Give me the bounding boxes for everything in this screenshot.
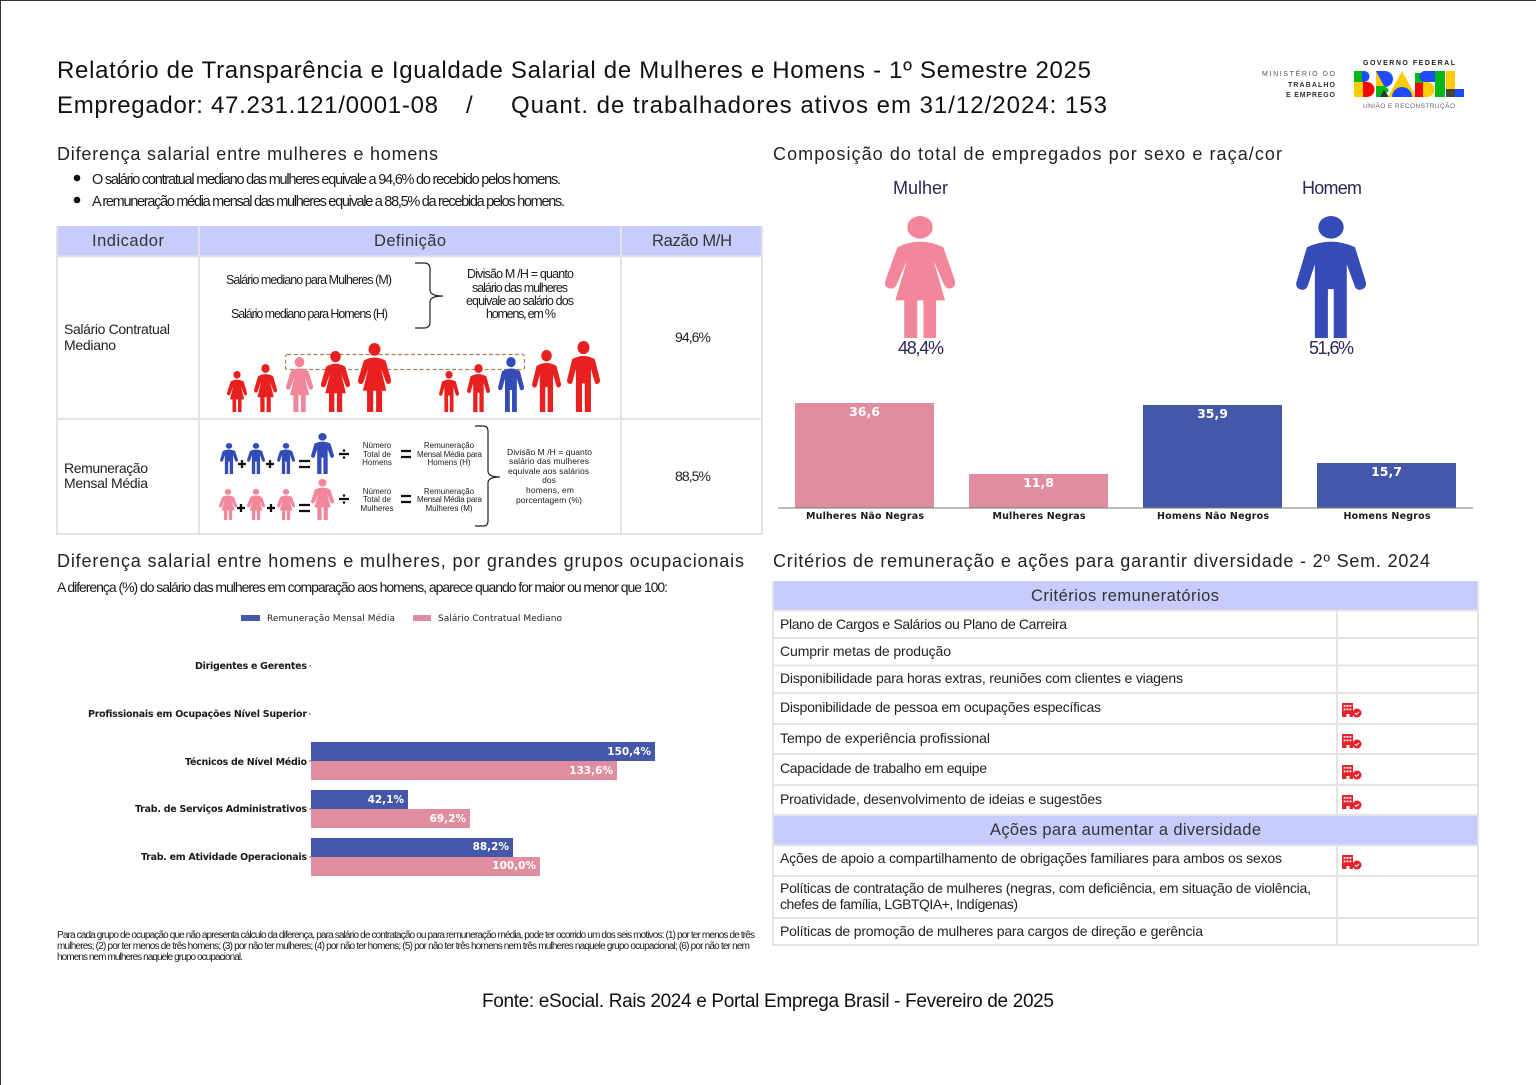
formula text: men and women: Remuneração [424,487,475,496]
bullet list: A remuneração média mensal das mulheres equivale a 88,5% da recebida pelos homens. [92,194,565,210]
formula text: men and women: Número [363,487,392,496]
table: remuneration criteria: Capacidade de trabalho em equipe [780,760,987,776]
table: remuneration criteria: Proatividade, desenvolvimento de ideias e sugestões [780,791,1102,807]
bar chart: occupations: Profissionais em Ocupações Nível Superior [88,709,307,720]
definition: median salary: Divisão M /H = quanto [467,267,574,281]
table: remuneration criteria: Critérios remuneratórios [1031,587,1219,605]
value: 48,4%: 48,4% [898,338,944,358]
table: remuneration criteria: Disponibilidade para horas extras, reuniões com clientes e viagens [780,670,1183,686]
table: diversity actions: Ações para aumentar a diversidade [990,821,1261,839]
footnote [57,930,755,963]
source note: Fonte: eSocial. Rais 2024 e Portal Emprega Brasil - Fevereiro de 2025 [482,991,1054,1012]
title [57,57,1107,119]
formula text: men and women: Mulheres (M) [425,504,473,513]
title: Quant. de trabalhadores ativos em 31/12/2024: 153 [511,92,1107,119]
bar chart: occupations: 88,2% [473,841,509,853]
panel: composition [773,144,1473,522]
bar chart: sex and race: Mulheres Não Negras [806,511,924,522]
definition: median salary: homens, em % [486,307,556,321]
definition: median salary: Salário mediano para Mulheres (M) [226,273,392,287]
formula text: men and women: equivale aos salários [508,466,589,476]
table: diversity actions: Políticas de promoção de mulheres para cargos de direção e gerência [780,923,1203,939]
formula text: men and women: Homens (H) [427,458,471,467]
table header [92,232,732,250]
formula text: men and women: dos [542,475,556,485]
bar chart: occupations [88,661,655,876]
definition: median salary [226,263,574,328]
title: / [466,92,473,119]
bullet list [74,172,565,210]
subtitle: A diferença (%) do salário das mulheres em comparação aos homens, aparece quando for maior ou menor que 100: [57,579,668,595]
bar chart: sex and race: 15,7 [1371,464,1402,479]
table: remuneration criteria: Disponibilidade de pessoa em ocupações específicas [780,699,1101,715]
bar chart: sex and race: Homens Não Negros [1157,511,1269,522]
icons: median pictogram row [227,341,600,412]
icon: action present [1342,855,1362,870]
row label: remuneração mensal média: Mensal Média [64,475,148,491]
bar chart: occupations: Dirigentes e Gerentes [195,661,307,672]
bar chart: sex and race: Homens Negros [1344,511,1431,522]
formula text: men and women: Mensal Média para [417,450,483,459]
formula text: men and women: Remuneração [424,441,475,450]
table: remuneration criteria: Plano de Cargos e Salários ou Plano de Carreira [780,616,1067,632]
formula text: men and women [361,426,592,526]
ministry logo: TRABALHO [1288,82,1336,89]
formula text: men and women: Total de [363,495,392,504]
table: diversity actions [780,821,1311,939]
bar chart: occupations: Trab. em Atividade Operacionais [141,852,307,863]
bar chart: sex and race [778,403,1473,522]
title: Empregador: 47.231.121/0001-08 [57,92,438,119]
footnote: homens nem mulheres naquele grupo ocupacional. [57,952,243,963]
formula text: men and women: Número [363,441,392,450]
bar chart: occupations: Trab. de Serviços Administrativos [135,804,307,815]
ministry logo: MINISTÉRIO DO [1262,69,1336,78]
title: Relatório de Transparência e Igualdade Salarial de Mulheres e Homens - 1º Semestre 2025 [57,57,1091,84]
footnote: Para cada grupo de ocupação que não apresenta cálculo da diferença, para salário de contratação ou para remuneração média, pode ter ocorrido um dos seis motivos: (1) por ter menos de três [57,930,755,941]
bar chart: sex and race: 35,9 [1197,406,1228,421]
bullet list: O salário contratual mediano das mulheres equivale a 94,6% do recebido pelos homens. [92,172,561,188]
value: 51,6%: 51,6% [1309,338,1354,358]
bar chart: sex and race: 36,6 [849,404,880,419]
ministry logo: E EMPREGO [1286,92,1336,99]
formula text: men and women: Mulheres [361,504,393,513]
footnote: mulheres; (2) por ter menos de três homens; (3) por não ter mulheres; (4) por não ter homens; (5) por não ter três homens nem três mulheres naquele grupo ocupacional; (6) por não ter nem [57,941,750,952]
row label: salário contratual mediano: Mediano [64,337,116,353]
table header: Indicador [92,232,164,250]
heading: occupational groups: Diferença salarial entre homens e mulheres, por grandes grupos ocupacionais [57,551,744,571]
table: remuneration criteria [780,587,1219,807]
ministry logo [1262,69,1336,99]
legend: Remuneração Mensal Média [267,613,395,624]
definition: median salary: equivale ao salário dos [466,294,574,308]
label: Mulher: Mulher [893,178,948,198]
formula text: men and women: salário das mulheres [509,456,589,466]
table header: Razão M/H [652,232,732,250]
label: Homem: Homem [1302,178,1362,198]
formula text: men and women: homens, em [526,485,574,495]
icons: criteria present [1342,703,1362,810]
legend [241,613,562,624]
bar chart: occupations: 42,1% [368,794,404,806]
bar chart: occupations: 133,6% [569,765,613,777]
table: diversity actions: Ações de apoio a compartilhamento de obrigações familiares para ambos os sexos [780,850,1282,866]
row label: salário contratual mediano [64,321,170,353]
heading: criteria: Critérios de remuneração e ações para garantir diversidade - 2º Sem. 2024 [773,551,1430,571]
ratio: 88,5%: 88,5% [675,468,711,484]
panel: occupational groups [57,551,755,963]
ratio: 94,6%: 94,6% [675,329,711,345]
icon: man [1296,216,1366,338]
icon: woman [885,216,955,338]
government logo [1354,60,1464,110]
table: remuneration criteria: Tempo de experiência profissional [780,730,990,746]
heading: composition: Composição do total de empregados por sexo e raça/cor [773,144,1282,164]
definition: median salary: salário das mulheres [472,281,568,295]
panel: salary gap [57,144,565,210]
table: diversity actions: chefes de família, LGBTQIA+, Indígenas) [780,896,1018,912]
bar chart: sex and race: 11,8 [1023,475,1054,490]
formula text: men and women: Homens [362,458,392,467]
row label: remuneração mensal média [64,460,148,491]
row label: remuneração mensal média: Remuneração [64,460,148,476]
table: remuneration criteria: Cumprir metas de produção [780,643,951,659]
bar chart: occupations: 100,0% [492,860,536,872]
icons: average formula pictograms [219,433,411,520]
government logo: GOVERNO FEDERAL [1363,60,1456,67]
formula text: men and women: porcentagem (%) [516,495,582,505]
table: diversity actions: Políticas de contratação de mulheres (negras, com deficiência, em situação de violência, [780,880,1311,896]
table header: Definição [374,232,446,250]
government logo: UNIÃO E RECONSTRUÇÃO [1363,101,1455,110]
bar chart: occupations: 69,2% [430,813,466,825]
row label: salário contratual mediano: Salário Contratual [64,321,170,337]
panel: indicators table [57,226,762,534]
definition: median salary: Salário mediano para Homens (H) [231,307,388,321]
heading: salary gap: Diferença salarial entre mulheres e homens [57,144,438,164]
formula text: men and women: Divisão M /H = quanto [507,447,592,457]
formula text: men and women: Mensal Média para [417,495,483,504]
bar chart: sex and race: Mulheres Negras [992,511,1086,522]
bar chart: occupations: Técnicos de Nível Médio [185,757,307,768]
bar chart: occupations: 150,4% [607,746,651,758]
legend: Salário Contratual Mediano [438,614,562,624]
panel: criteria and actions [773,551,1478,945]
formula text: men and women: Total de [363,450,392,459]
